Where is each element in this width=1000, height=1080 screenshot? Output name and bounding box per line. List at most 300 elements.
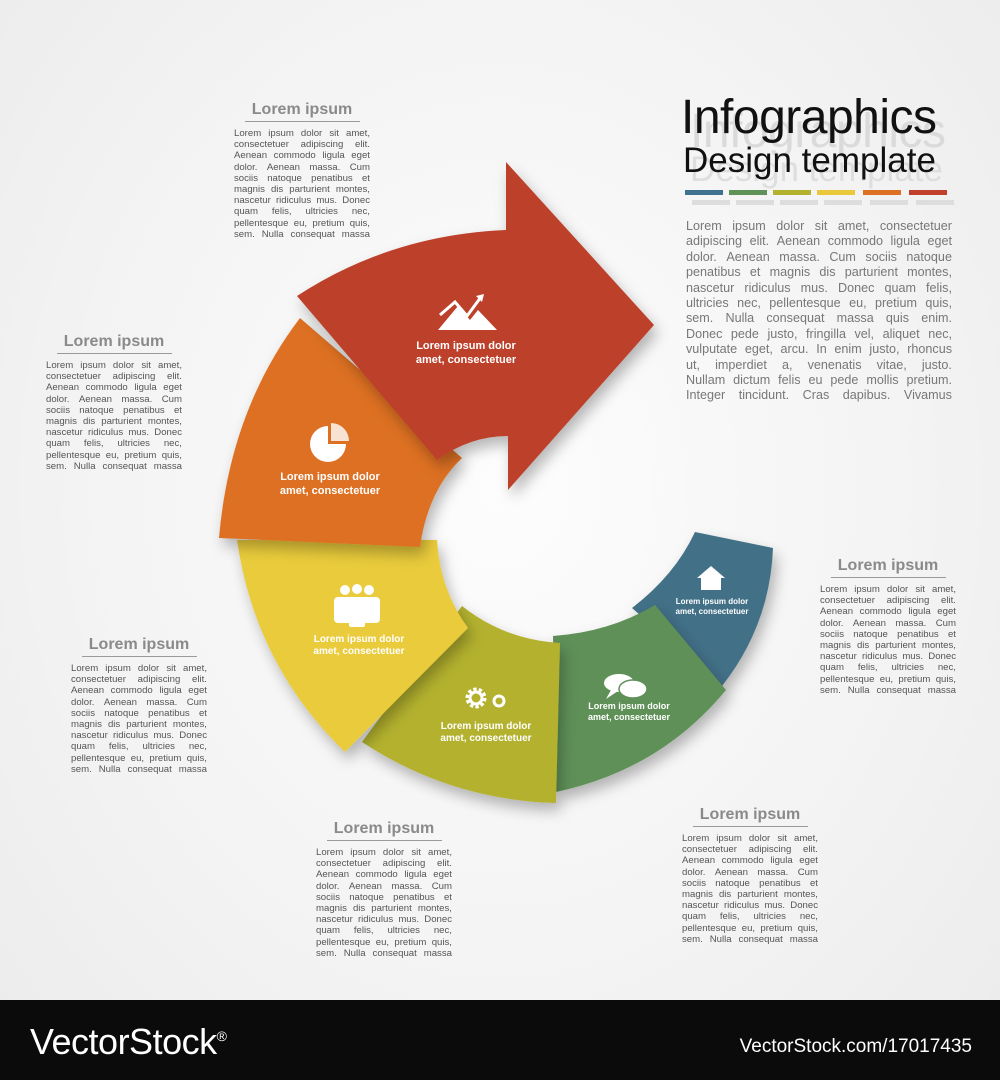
text block: right upper: mus.: [902, 651, 923, 662]
text block: right upper: consequat: [877, 685, 921, 696]
text block: left lower: Lorem: [71, 663, 98, 674]
text block: top: natoque: [267, 173, 302, 184]
text block: left lower: sit: [166, 663, 176, 674]
text block: right upper: Donec: [928, 651, 956, 662]
text block: right lower: sem.: [682, 934, 703, 945]
text block: right lower: consectetuer: [682, 844, 737, 855]
text block: right lower: pretium: [760, 923, 792, 934]
text block: right upper: montes,: [922, 640, 956, 651]
text block: left upper: felis,: [84, 438, 104, 449]
text block: left upper: quam: [46, 438, 70, 449]
main paragraph: nascetur: [686, 281, 734, 295]
icon: people: [334, 584, 380, 627]
text block: left lower: natoque: [104, 708, 139, 719]
main paragraph: fringilla: [806, 327, 846, 341]
icon: house: [697, 566, 725, 590]
main paragraph: elit.: [750, 234, 769, 248]
text block: left upper: dis: [83, 416, 95, 427]
text block: right upper: eu,: [880, 674, 893, 685]
text block: bottom: quis,: [432, 937, 452, 948]
text block: bottom: Aenean: [349, 881, 382, 892]
text block: bottom: montes,: [418, 903, 452, 914]
text block: left upper: magnis: [46, 416, 77, 427]
main paragraph: quis,: [925, 296, 952, 310]
text block: right upper: ridiculus: [862, 651, 897, 662]
text block: right upper: [820, 557, 956, 696]
text block: right lower: dis: [719, 889, 731, 900]
text block: left lower: massa: [179, 764, 207, 775]
segment: red arrow: Lorem ipsum dolor: [416, 340, 517, 352]
text block: top: felis,: [272, 206, 292, 217]
text block: left upper: quis,: [162, 450, 182, 461]
text block: top: pellentesque: [234, 218, 288, 229]
main paragraph: venenatis: [808, 358, 862, 372]
text block: left upper: Cum: [162, 394, 182, 405]
text block: right lower: ultricies: [753, 911, 786, 922]
footer bar: VectorStock®: [30, 1021, 226, 1062]
text block: left lower: elit.: [192, 674, 207, 685]
text block: right lower: Cum: [798, 867, 818, 878]
text block: right upper: nec,: [938, 662, 956, 673]
text block: left upper: commodo: [86, 382, 128, 393]
text block: bottom: dolor: [383, 847, 404, 858]
text block: left lower: consectetuer: [71, 674, 126, 685]
text block: left upper: consectetuer: [46, 371, 101, 382]
text block: right upper: pellentesque: [820, 674, 874, 685]
text block: left lower: Donec: [179, 730, 207, 741]
text block: right upper: dolor: [887, 584, 908, 595]
text block: right upper: Lorem: [820, 584, 847, 595]
text block: right upper: pretium: [898, 674, 930, 685]
segment: yellow: amet, consectetuer: [313, 646, 405, 657]
text block: left upper: eget: [163, 382, 182, 393]
text block: right lower: quam: [682, 911, 706, 922]
text block: bottom: Lorem: [316, 847, 343, 858]
main paragraph: a,: [782, 358, 793, 372]
text block: left lower: felis,: [109, 741, 129, 752]
text block: left upper: sem.: [46, 461, 67, 472]
text block: top: ipsum: [268, 128, 294, 139]
text block: right lower: quis,: [798, 923, 818, 934]
segment: green: amet, consectetuer: [588, 712, 671, 722]
text block: right lower: sit: [777, 833, 787, 844]
main paragraph: pede: [830, 373, 858, 387]
text block: left upper: consequat: [103, 461, 147, 472]
text block: right lower: eu,: [742, 923, 755, 934]
text block: left lower: Nulla: [99, 764, 121, 775]
text block: top: Lorem ipsum: [252, 101, 352, 118]
text block: left lower: amet,: [183, 663, 207, 674]
text block: top: massa.: [309, 162, 340, 173]
main paragraph: justo,: [869, 342, 900, 356]
text block: left lower: Aenean: [104, 697, 137, 708]
text block: right upper: ultricies: [891, 662, 924, 673]
main paragraph: eget: [927, 234, 952, 248]
text block: right upper: dolor.: [820, 618, 843, 629]
text block: bottom: nascetur: [316, 914, 353, 925]
text block: right upper: dis: [857, 640, 869, 651]
main paragraph: pede: [731, 327, 759, 341]
footer bar: [0, 1000, 1000, 1080]
title: Infographics: [681, 91, 936, 144]
text block: top: pretium: [312, 218, 344, 229]
segment: orange: [219, 318, 462, 547]
main paragraph: justo.: [922, 358, 952, 372]
text block: right upper: amet,: [932, 584, 956, 595]
segment: yellow: [237, 540, 468, 752]
text block: bottom: elit.: [437, 858, 452, 869]
text block: top: elit.: [355, 139, 370, 150]
text block: left lower: eu,: [131, 753, 144, 764]
main paragraph: sit: [815, 219, 827, 233]
text block: left upper: ultricies: [117, 438, 150, 449]
text block: top: sem.: [234, 229, 255, 240]
text block: bottom: penatibus: [393, 892, 435, 903]
text block: right lower: montes,: [784, 889, 818, 900]
text block: left lower: montes,: [173, 719, 207, 730]
main paragraph: ridiculus: [744, 281, 791, 295]
main paragraph: Cras: [803, 388, 829, 402]
text block: left upper: montes,: [148, 416, 182, 427]
text block: left lower: ligula: [159, 685, 182, 696]
text block: left upper: Nulla: [74, 461, 96, 472]
text block: left upper: elit.: [167, 371, 182, 382]
text block: top: quis,: [350, 218, 370, 229]
segment: olive: amet, consectetuer: [440, 733, 532, 744]
text block: right upper: et: [948, 629, 956, 640]
text block: right upper: Nulla: [848, 685, 870, 696]
segment: green: [553, 605, 726, 792]
main paragraph: ligula: [891, 234, 920, 248]
text block: bottom: magnis: [316, 903, 347, 914]
text block: top: dolor.: [234, 162, 257, 173]
text block: right lower: Aenean: [682, 855, 715, 866]
text block: bottom: massa.: [391, 881, 422, 892]
title: [681, 91, 954, 205]
main paragraph: amet,: [838, 219, 869, 233]
text block: top: ligula: [322, 150, 345, 161]
text block: left upper: nec,: [164, 438, 182, 449]
main paragraph: magnis: [770, 265, 810, 279]
segment: blue: amet, consectetuer: [676, 607, 748, 616]
main paragraph: Aenean: [726, 250, 770, 264]
text block: bottom: parturient: [371, 903, 412, 914]
text block: left lower: ridiculus: [113, 730, 148, 741]
text block: left upper: penatibus: [123, 405, 165, 416]
main paragraph: mollis: [866, 373, 899, 387]
main paragraph: felis,: [926, 281, 952, 295]
text block: right upper: Aenean: [853, 618, 886, 629]
text block: top: Nulla: [262, 229, 284, 240]
text block: left upper: Donec: [154, 427, 182, 438]
text block: bottom: ipsum: [350, 847, 376, 858]
text block: right lower: eget: [799, 855, 818, 866]
text block: top: sit: [329, 128, 339, 139]
text block: right lower: dolor.: [682, 867, 705, 878]
text block: bottom: natoque: [349, 892, 384, 903]
text block: right lower: dolor: [749, 833, 770, 844]
title: Infographics: [690, 105, 946, 158]
text block: top: massa: [342, 229, 370, 240]
main paragraph: Vivamus: [904, 388, 952, 402]
text block: bottom: Lorem ipsum: [334, 820, 434, 837]
segment: red arrow: [297, 162, 654, 490]
text block: right upper: consectetuer: [820, 595, 875, 606]
main paragraph: ipsum: [732, 219, 766, 233]
text block: left lower: sociis: [71, 708, 95, 719]
text block: left lower: penatibus: [148, 708, 190, 719]
text block: top: ridiculus: [276, 195, 311, 206]
text block: left lower: mus.: [153, 730, 174, 741]
text block: right upper: nascetur: [820, 651, 857, 662]
text block: bottom: ligula: [404, 869, 427, 880]
text block: left lower: commodo: [111, 685, 153, 696]
text block: right upper: adipiscing: [887, 595, 929, 606]
text block: right upper: sit: [915, 584, 925, 595]
text block: top: quam: [234, 206, 258, 217]
text block: left upper: sociis: [46, 405, 70, 416]
text block: left lower: magnis: [71, 719, 102, 730]
text block: left upper: et: [174, 405, 182, 416]
text block: right upper: sem.: [820, 685, 841, 696]
text block: right lower: nec,: [800, 911, 818, 922]
text block: right lower: massa.: [757, 867, 788, 878]
text block: right upper: quis,: [936, 674, 956, 685]
main paragraph: eu,: [849, 296, 867, 310]
text block: right upper: Cum: [936, 618, 956, 629]
text block: bottom: ultricies: [387, 925, 420, 936]
text block: right lower: elit.: [803, 844, 818, 855]
text block: left upper: Aenean: [46, 382, 79, 393]
segment: orange: amet, consectetuer: [280, 485, 381, 497]
text block: left upper: natoque: [79, 405, 114, 416]
main paragraph: massa.: [779, 250, 820, 264]
main paragraph: nec,: [737, 296, 761, 310]
text block: right upper: parturient: [875, 640, 916, 651]
text block: right lower: Lorem: [682, 833, 709, 844]
text block: right upper: Aenean: [820, 606, 853, 617]
text block: left lower: sem.: [71, 764, 92, 775]
text block: left upper: mus.: [128, 427, 149, 438]
main paragraph: mus.: [801, 281, 828, 295]
text block: right lower: mus.: [764, 900, 785, 911]
main paragraph: sociis: [865, 250, 897, 264]
text block: left upper: pellentesque: [46, 450, 100, 461]
text block: left lower: Aenean: [71, 685, 104, 696]
text block: right lower: natoque: [715, 878, 750, 889]
main paragraph: [686, 219, 952, 402]
text block: bottom: consequat: [373, 948, 417, 959]
text block: left lower: consequat: [128, 764, 172, 775]
text block: bottom: Cum: [432, 881, 452, 892]
text block: bottom: quam: [316, 925, 340, 936]
text block: right lower: consequat: [739, 934, 783, 945]
main paragraph: dolor.: [686, 250, 717, 264]
segment: olive: [362, 606, 560, 803]
main paragraph: ultricies: [686, 296, 729, 310]
main paragraph: imperdiet: [715, 358, 767, 372]
icon: gears: [468, 690, 504, 706]
main paragraph: dolor: [776, 219, 804, 233]
text block: bottom: sit: [411, 847, 421, 858]
main paragraph: vulputate: [686, 342, 737, 356]
text block: right lower: et: [810, 878, 818, 889]
text block: top: nec,: [352, 206, 370, 217]
text block: top: dis: [271, 184, 283, 195]
text block: left lower: adipiscing: [138, 674, 180, 685]
text block: top: Donec: [342, 195, 370, 206]
text block: left lower: nec,: [189, 741, 207, 752]
segment: blue: [632, 532, 773, 686]
segment: red arrow: amet, consectetuer: [416, 354, 517, 366]
text block: right upper: commodo: [860, 606, 902, 617]
text block: left lower: ultricies: [142, 741, 175, 752]
text block: right upper: ipsum: [854, 584, 880, 595]
main paragraph: dictum: [733, 373, 770, 387]
text block: bottom: eu,: [376, 937, 389, 948]
text block: bottom: Nulla: [344, 948, 366, 959]
text block: right lower: [682, 806, 818, 945]
text block: left upper: dolor: [113, 360, 134, 371]
text block: bottom: pretium: [394, 937, 426, 948]
text block: right upper: felis,: [858, 662, 878, 673]
text block: right lower: adipiscing: [749, 844, 791, 855]
main paragraph: commodo: [828, 234, 883, 248]
text block: left lower: dis: [108, 719, 120, 730]
text block: right lower: Nulla: [710, 934, 732, 945]
main paragraph: consectetuer: [880, 219, 952, 233]
main paragraph: tincidunt.: [739, 388, 789, 402]
text block: bottom: massa: [424, 948, 452, 959]
text block: left lower: pellentesque: [71, 753, 125, 764]
text block: top: et: [362, 173, 370, 184]
text block: right upper: quam: [820, 662, 844, 673]
main paragraph: dapibus.: [843, 388, 890, 402]
text block: right upper: elit.: [941, 595, 956, 606]
text block: top: Lorem: [234, 128, 261, 139]
text block: right upper: massa: [928, 685, 956, 696]
text block: left upper: adipiscing: [113, 371, 155, 382]
text block: left upper: dolor.: [46, 394, 69, 405]
text block: right upper: natoque: [853, 629, 888, 640]
main paragraph: eu: [808, 373, 822, 387]
text block: right upper: eget: [937, 606, 956, 617]
text block: left upper: nascetur: [46, 427, 83, 438]
text block: left upper: pretium: [124, 450, 156, 461]
text block: top: consectetuer: [234, 139, 289, 150]
text block: left lower: pretium: [149, 753, 181, 764]
text block: bottom: adipiscing: [383, 858, 425, 869]
text block: bottom: [316, 820, 452, 959]
main paragraph: Nulla: [725, 311, 754, 325]
text block: top: [234, 101, 370, 240]
title: Design template: [690, 150, 943, 189]
text block: top: eget: [351, 150, 370, 161]
text block: left upper: amet,: [158, 360, 182, 371]
segment: orange: Lorem ipsum dolor: [280, 471, 381, 483]
main paragraph: Integer: [686, 388, 725, 402]
main paragraph: arcu.: [781, 342, 809, 356]
text block: top: mus.: [316, 195, 337, 206]
text block: left lower: et: [199, 708, 207, 719]
segment: yellow: Lorem ipsum dolor: [314, 634, 404, 645]
text block: top: Aenean: [234, 150, 267, 161]
main paragraph: rhoncus: [907, 342, 952, 356]
main paragraph: adipiscing: [686, 234, 742, 248]
text block: right lower: penatibus: [759, 878, 801, 889]
text block: top: sociis: [234, 173, 258, 184]
main paragraph: aliquet: [883, 327, 920, 341]
text block: right lower: parturient: [737, 889, 778, 900]
text block: left lower: quis,: [187, 753, 207, 764]
text block: top: magnis: [234, 184, 265, 195]
text block: left upper: ridiculus: [88, 427, 123, 438]
text block: bottom: dolor.: [316, 881, 339, 892]
text block: left upper: massa: [154, 461, 182, 472]
main paragraph: massa: [837, 311, 874, 325]
text block: top: commodo: [274, 150, 316, 161]
main paragraph: pretium: [875, 296, 917, 310]
main paragraph: quis: [886, 311, 909, 325]
text block: top: Cum: [350, 162, 370, 173]
title: Design template: [683, 141, 936, 180]
main paragraph: nec,: [928, 327, 952, 341]
text block: left lower: parturient: [126, 719, 167, 730]
text block: bottom: felis,: [354, 925, 374, 936]
text block: right lower: commodo: [722, 855, 764, 866]
main paragraph: dis: [819, 265, 836, 279]
text block: left lower: dolor.: [71, 697, 94, 708]
text block: bottom: et: [444, 892, 452, 903]
text block: left upper: sit: [141, 360, 151, 371]
main paragraph: sem.: [686, 311, 713, 325]
main paragraph: montes,: [907, 265, 952, 279]
text block: right lower: massa: [790, 934, 818, 945]
text block: top: eu,: [294, 218, 307, 229]
text block: right upper: penatibus: [897, 629, 939, 640]
text block: bottom: mus.: [398, 914, 419, 925]
main paragraph: Aenean: [777, 234, 820, 248]
text block: top: dolor: [301, 128, 322, 139]
main paragraph: In: [816, 342, 827, 356]
text block: left upper: ipsum: [80, 360, 106, 371]
text block: bottom: Aenean: [316, 869, 349, 880]
text block: bottom: ridiculus: [358, 914, 393, 925]
text block: top: Aenean: [267, 162, 300, 173]
text block: right lower: Aenean: [715, 867, 748, 878]
text block: left upper: parturient: [101, 416, 142, 427]
text block: top: consequat: [291, 229, 335, 240]
main paragraph: enim.: [921, 311, 952, 325]
main paragraph: consequat: [766, 311, 824, 325]
text block: right lower: nascetur: [682, 900, 719, 911]
text block: bottom: pellentesque: [316, 937, 370, 948]
text block: left upper: [46, 333, 182, 472]
text block: left upper: Lorem: [46, 360, 73, 371]
main paragraph: Cum: [829, 250, 856, 264]
segment: green: Lorem ipsum dolor: [588, 701, 670, 711]
text block: left lower: [71, 636, 207, 775]
text block: right lower: ipsum: [716, 833, 742, 844]
main paragraph: natoque: [906, 250, 952, 264]
segment: blue: Lorem ipsum dolor: [676, 597, 748, 606]
text block: left lower: dolor: [138, 663, 159, 674]
text block: right upper: magnis: [820, 640, 851, 651]
text block: bottom: eget: [433, 869, 452, 880]
main paragraph: Nullam: [686, 373, 725, 387]
text block: right lower: felis,: [720, 911, 740, 922]
main paragraph: eget,: [745, 342, 773, 356]
